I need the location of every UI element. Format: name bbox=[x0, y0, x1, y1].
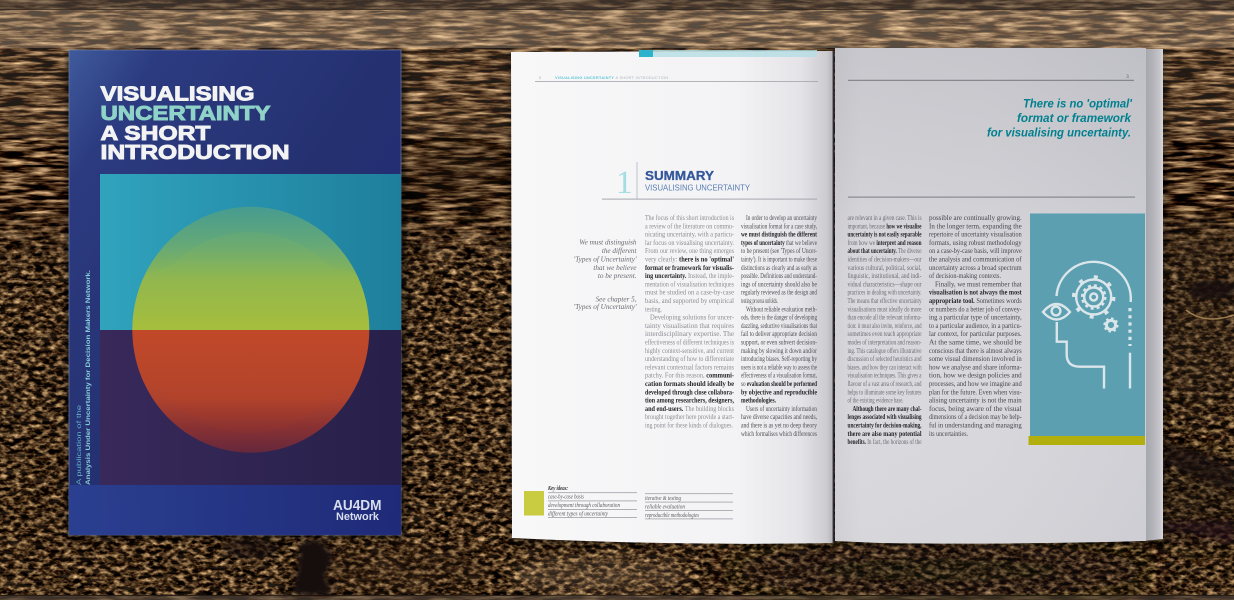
AU4DM logo: AU4DM bbox=[333, 497, 382, 514]
body text column 3: biases, and how they can interact with bbox=[848, 362, 922, 371]
body text column 1: From our review, one thing emerges bbox=[645, 246, 734, 255]
cover shadow bbox=[66, 52, 406, 539]
running header: VISUALISING UNCERTAINTY A SHORT INTRODUCTION bbox=[555, 76, 668, 80]
top colour tab bbox=[639, 50, 817, 57]
body text column 2: tainty'). It is important to make these bbox=[741, 254, 817, 264]
key ideas box: reproducible methodologies bbox=[645, 512, 699, 519]
panel: right book page bbox=[833, 48, 1163, 544]
cover title bbox=[100, 82, 290, 164]
running header: 2 bbox=[539, 76, 541, 80]
margin notes: 'Types of Uncertainty' bbox=[574, 303, 637, 311]
body text column 1: a review of the literature on commu- bbox=[645, 221, 734, 230]
body text column 1: mentation of visualisation techniques bbox=[645, 279, 734, 288]
body text column 4: At the same time, we should be bbox=[929, 338, 1022, 346]
body text column 4: plan for the future. Even when visu- bbox=[929, 387, 1022, 396]
margin notes: to be present. bbox=[598, 272, 637, 280]
body text column 4: visualisation is not always the most bbox=[929, 288, 1022, 297]
body text column 2: In order to develop an uncertainty bbox=[746, 213, 817, 222]
body text column 2: ings of uncertainty should also be bbox=[741, 279, 817, 288]
body text column 4: ful in understanding and managing bbox=[929, 420, 1022, 430]
body text column 2: testing process unfolds. bbox=[741, 296, 778, 305]
teal illustration panel bbox=[1030, 214, 1145, 436]
body text column 3: identities of decision-makers—our bbox=[848, 254, 922, 264]
body text column 4: the analysis and communication of bbox=[929, 254, 1022, 264]
key ideas box bbox=[524, 485, 733, 519]
body text column 1: ing uncertainty. Instead, the imple- bbox=[645, 271, 734, 280]
icon: head with gears and eye bbox=[1043, 262, 1131, 388]
body text column 1: testing. bbox=[645, 304, 662, 313]
body text column 3: modes of interpretation and reason- bbox=[848, 338, 922, 346]
body text column 2: we must distinguish the different bbox=[741, 230, 817, 239]
body text column 1: ing point for these kinds of dialogues. bbox=[645, 420, 733, 430]
chapter heading bbox=[602, 162, 817, 201]
body text column 4: formats, using robust methodology bbox=[929, 238, 1022, 247]
body text column 2: dazzling, seductive visualisations that bbox=[741, 321, 818, 330]
spine publication note: A publication of the bbox=[76, 404, 83, 485]
body text column 1: understanding of how to differentiate bbox=[645, 354, 735, 363]
cover title: A SHORT bbox=[100, 122, 211, 145]
body text column 2: have diverse capacities and needs, bbox=[741, 412, 817, 421]
body text column 2: which formalises which differences bbox=[741, 429, 817, 438]
body text column 3: are relevant in a given case. This is bbox=[848, 213, 922, 222]
right page sheet bbox=[835, 48, 1146, 544]
body text column 3: discussion of selected heuristics and bbox=[848, 354, 922, 363]
body text column 1: nicating uncertainty, with a particu- bbox=[645, 230, 734, 239]
body text column 4: or numbers do a better job of convey- bbox=[929, 304, 1022, 313]
body text column 3: The means that effective uncertainty bbox=[848, 296, 922, 305]
chapter heading: 1 bbox=[616, 165, 632, 201]
pull quote: format or framework bbox=[1017, 112, 1132, 125]
body text column 2: to be present (see 'Types of Uncer- bbox=[741, 246, 817, 255]
body text column 1: basis, and supported by empirical bbox=[645, 296, 734, 305]
wood knots and cracks bbox=[222, 280, 1234, 595]
body text column 3: helps to illuminate some key features bbox=[848, 387, 922, 396]
body text column 2: ods, there is the danger of developing bbox=[741, 313, 817, 322]
body text column 4: In the longer term, expanding the bbox=[929, 221, 1022, 230]
body text column 2: Users of uncertainty information bbox=[746, 404, 817, 413]
body text column 1: highly context-sensitive, and current bbox=[645, 346, 735, 355]
spine publication note bbox=[76, 270, 92, 485]
body text column 3: visualisation techniques. This gives a bbox=[848, 371, 922, 380]
margin notes: that we believe bbox=[593, 264, 637, 272]
body text column 4: tion, how we design policies and bbox=[929, 371, 1022, 380]
cover title: INTRODUCTION bbox=[100, 141, 290, 164]
left page sheet bbox=[511, 51, 833, 544]
body text column 1: tainty visualisation that requires bbox=[645, 321, 734, 330]
pull quote bbox=[987, 97, 1133, 139]
key ideas box: different types of uncertainty bbox=[548, 510, 608, 518]
body text column 4: some visual dimension involved in bbox=[929, 354, 1022, 363]
panel: brochure cover bbox=[69, 50, 401, 535]
body text column 4: uncertainty across a broad spectrum bbox=[929, 263, 1022, 272]
body text column 3: uncertainty for decision-making, bbox=[848, 420, 922, 430]
AU4DM logo bbox=[333, 497, 382, 523]
body text column 4: to a particular audience, in a particu- bbox=[929, 321, 1022, 330]
body text column 2: effectiveness of a visualisation format, bbox=[741, 371, 817, 380]
body text column 4: Finally, we must remember that bbox=[935, 279, 1023, 288]
olive bar bbox=[1028, 436, 1145, 445]
body text column 3: flavour of a vast area of research, and bbox=[848, 379, 922, 388]
body text column 1: lar focus on visualising uncertainty. bbox=[645, 238, 734, 247]
body text column 1: relevant contextual factors remains bbox=[645, 362, 734, 371]
body text column 3: important, because how we visualise bbox=[848, 221, 922, 230]
chapter heading: SUMMARY bbox=[645, 169, 715, 183]
body text column 4: possible are continually growing. bbox=[929, 213, 1022, 222]
body text column 4: focus, being aware of the visual bbox=[929, 404, 1022, 413]
body text column 1: cation formats should ideally be bbox=[645, 379, 735, 388]
cover title: VISUALISING bbox=[100, 82, 254, 106]
margin notes: the different bbox=[602, 247, 637, 255]
cover artwork bbox=[100, 174, 401, 485]
body text column 2 bbox=[741, 213, 818, 438]
key ideas box: case-by-case basis bbox=[548, 494, 584, 500]
body text column 4: alising uncertainty is not the main bbox=[929, 396, 1022, 405]
body text column 3: about that uncertainty. The diverse bbox=[848, 246, 922, 255]
body text column 3 bbox=[848, 213, 922, 446]
body text column 2: regularly reviewed as the design and bbox=[741, 288, 817, 297]
body text column 1 bbox=[645, 213, 735, 430]
body text column 3: from how we interpret and reason bbox=[848, 238, 922, 247]
chapter heading: VISUALISING UNCERTAINTY bbox=[645, 184, 751, 192]
body text column 3: Although there are many chal- bbox=[852, 404, 922, 413]
body text column 4: processes, and how we imagine and bbox=[929, 379, 1022, 388]
margin notes: We must distinguish bbox=[579, 238, 637, 246]
body text column 4: conscious that there is almost always bbox=[929, 346, 1022, 355]
body text column 2: possible. Definitions and understand- bbox=[741, 271, 817, 280]
page edge stack bbox=[1144, 49, 1163, 541]
body text column 1: and end-users. The building blocks bbox=[645, 404, 734, 413]
body text column 2: fail to deliver appropriate decision bbox=[741, 329, 817, 338]
body text column 3: sometimes even teach appropriate bbox=[848, 329, 922, 338]
body text column 3: uncertainty is not easily separable bbox=[848, 230, 922, 239]
body text column 2: users is not a reliable way to assess the bbox=[741, 362, 817, 371]
body text column 4: ing a particular type of uncertainty, bbox=[929, 313, 1022, 322]
body text column 2: by objective and reproducible bbox=[741, 387, 818, 396]
body text column 1: The focus of this short introduction is bbox=[645, 213, 734, 222]
cover background bbox=[69, 50, 401, 535]
body text column 1: interdisciplinary expertise. The bbox=[645, 329, 735, 338]
body text column 4 bbox=[929, 213, 1023, 438]
body text column 2: types of uncertainty that we believe bbox=[741, 238, 817, 247]
margin notes: See chapter 5, bbox=[596, 296, 637, 304]
body text column 1: tion among researchers, designers, bbox=[645, 396, 734, 405]
body text column 4: repertoire of uncertainty visualisation bbox=[929, 230, 1022, 239]
body text column 2: introducing biases. Self-reporting by bbox=[741, 354, 817, 363]
body text column 4: of decision-making contexts. bbox=[929, 271, 1001, 280]
spine shadow bbox=[833, 51, 834, 543]
book shadow bbox=[508, 52, 1168, 545]
pull quote: for visualising uncertainty. bbox=[987, 126, 1131, 139]
body text column 3: benefits. In fact, the horizons of the bbox=[848, 437, 922, 446]
body text column 4: appropriate tool. Sometimes words bbox=[929, 296, 1022, 305]
body text column 2: Without reliable evaluation meth- bbox=[746, 304, 817, 313]
body text column 3: there are also many potential bbox=[848, 429, 922, 438]
page number and top rule: 3 bbox=[1126, 74, 1129, 80]
body text column 3: vidual characteristics—shape our bbox=[848, 279, 922, 288]
body text column 2: support, or even subvert decision- bbox=[741, 338, 817, 346]
body text column 2: so evaluation should be performed bbox=[741, 379, 818, 388]
spine publication note: Analysis Under Uncertainty for Decision Makers Network. bbox=[85, 270, 92, 485]
body text column 4: on a case-by-case basis, will improve bbox=[929, 246, 1022, 255]
body text column 3: practices in dealing with uncertainty. bbox=[848, 288, 922, 297]
body text column 3: various cultural, political, social, bbox=[848, 263, 922, 272]
body text column 3: lenges associated with visualising bbox=[848, 412, 922, 421]
body text column 1: effectiveness of different techniques is bbox=[645, 338, 734, 346]
body text column 1: patchy. For this reason, communi- bbox=[645, 371, 734, 380]
body text column 1: very clearly: there is no 'optimal' bbox=[645, 254, 734, 264]
body text column 2: distinctions as clearly and as early as bbox=[741, 263, 817, 272]
running header bbox=[535, 76, 818, 82]
body text column 4: how we analyse and share informa- bbox=[929, 362, 1022, 371]
cover title: UNCERTAINTY bbox=[100, 102, 271, 125]
AU4DM logo: Network bbox=[336, 511, 380, 523]
key ideas box: development through collaboration bbox=[548, 502, 621, 509]
body text column 1: developed through close collabora- bbox=[645, 387, 734, 396]
body text column 3: linguistic, institutional, and indi- bbox=[848, 271, 922, 280]
body text column 4: lar context, for particular purposes. bbox=[929, 329, 1022, 338]
body text column 1: Developing solutions for uncer- bbox=[650, 313, 734, 322]
body text column 4: dimensions of a decision may be help- bbox=[929, 412, 1022, 421]
divider rule bbox=[848, 197, 1135, 198]
body text column 1: format or framework for visualis- bbox=[645, 263, 734, 272]
key ideas box: Key ideas: bbox=[547, 485, 568, 492]
margin notes bbox=[574, 238, 637, 311]
body text column 3: of the existing evidence base. bbox=[848, 396, 904, 405]
body text column 2: making by slowing it down and/or bbox=[741, 346, 817, 355]
key ideas box: reliable evaluation bbox=[645, 504, 686, 510]
pull quote: There is no 'optimal' bbox=[1023, 97, 1133, 110]
body text column 2: visualisation format for a case study, bbox=[741, 221, 817, 230]
margin notes: 'Types of Uncertainty' bbox=[574, 256, 637, 264]
body text column 1: must be studied on a case-by-case bbox=[645, 288, 735, 297]
body text column 2: and there is as yet no deep theory bbox=[741, 420, 817, 430]
body text column 4: its uncertainties. bbox=[929, 429, 968, 438]
key ideas box: iterative & testing bbox=[645, 495, 682, 502]
panel: left book page bbox=[511, 50, 833, 544]
body text column 3: tion: it must also invite, reinforce, and bbox=[848, 321, 922, 330]
body text column 1: brought together here provide a start- bbox=[645, 412, 734, 421]
body text column 3: than encode all the relevant informa- bbox=[848, 313, 922, 322]
body text column 3: ing. This catalogue offers illustrative bbox=[848, 346, 922, 355]
body text column 3: visualisations must ideally do more bbox=[848, 304, 922, 313]
body text column 2: methodologies. bbox=[741, 396, 776, 405]
